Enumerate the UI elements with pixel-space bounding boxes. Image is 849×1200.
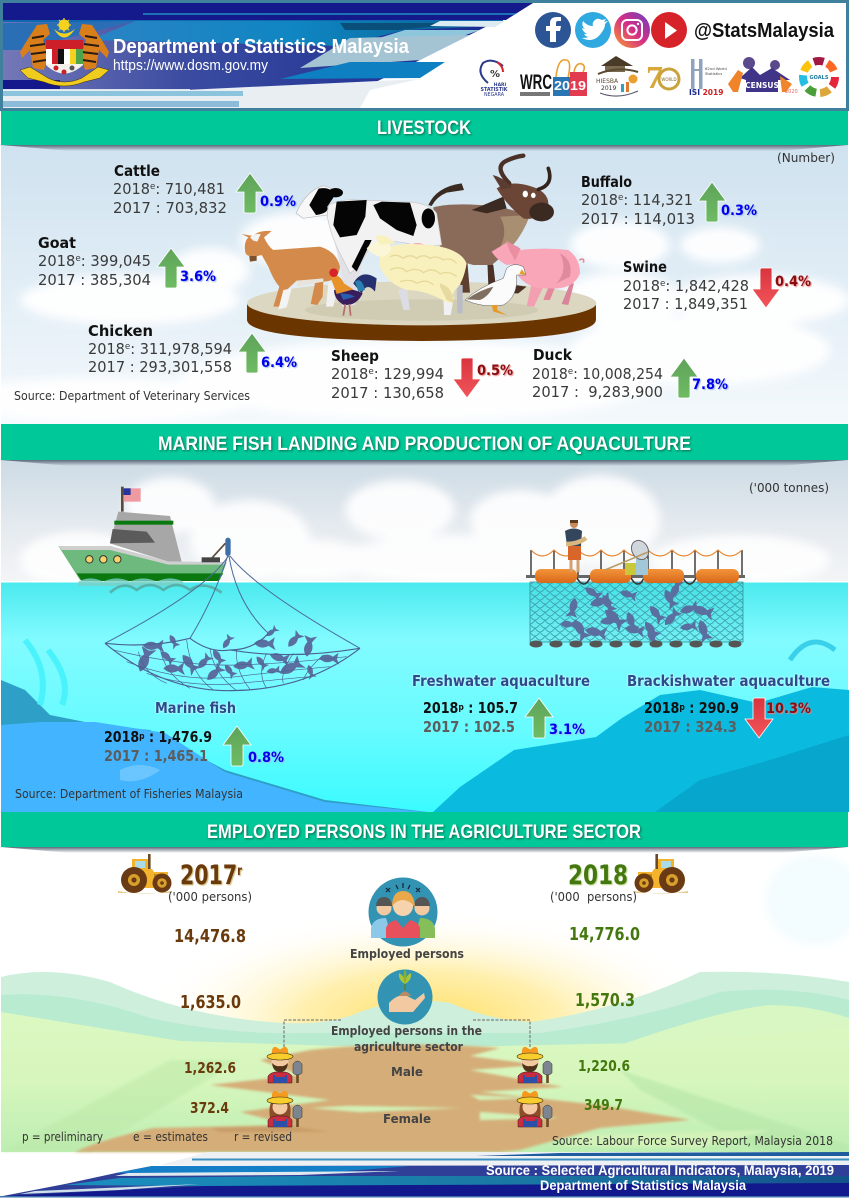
stat: swine: : 1,842,428	[665, 277, 749, 295]
stat: marine fish: : 1,476.9	[145, 728, 212, 746]
value: agriculture 2017: 1,635.0	[180, 992, 241, 1013]
stat: swine: Swine	[623, 258, 667, 276]
legend: p = preliminary	[22, 1130, 103, 1144]
section bar: employment	[1, 812, 848, 847]
text: unit 2018: ('000 persons)	[550, 890, 637, 904]
source: fisheries: Source: Department of Fisheries Malaysia	[15, 787, 243, 801]
value: male 2017: 1,262.6	[184, 1059, 236, 1077]
stat: goat: 2018	[38, 252, 76, 270]
ribbon	[20, 67, 109, 86]
logo: Census 2020: CENSUS	[745, 81, 779, 90]
stat: chicken	[88, 322, 297, 376]
shield	[46, 40, 83, 74]
stat: swine: e	[660, 279, 666, 289]
header banner	[0, 0, 849, 111]
stat: freshwater aquaculture: 3.1%	[549, 722, 585, 738]
logo: Census 2020: 2020	[785, 89, 798, 95]
stat: freshwater aquaculture	[412, 672, 590, 738]
stat: sheep: e	[368, 367, 374, 377]
stat: cattle: Cattle	[114, 162, 160, 180]
stat: freshwater aquaculture: 2018	[423, 699, 465, 717]
stat: duck: 7.8%	[692, 377, 728, 393]
stat: buffalo	[581, 173, 757, 228]
logo: SDG wheel: GOALS	[810, 75, 829, 81]
heading: marine: MARINE FISH LANDING AND PRODUCTION OF AQUACULTURE	[158, 434, 691, 455]
logo: WRC 2019: 2019	[554, 78, 586, 93]
year: 2018: 2018	[568, 860, 628, 891]
animal: cow	[296, 186, 442, 307]
cage net	[530, 582, 743, 642]
panel: marine and aquaculture	[1, 460, 849, 812]
stat: duck	[532, 346, 728, 401]
stat: chicken: 6.4%	[261, 355, 297, 371]
stat: goat: : 399,045	[81, 252, 151, 270]
section bar: marine	[1, 424, 848, 460]
panel: employed persons	[1, 847, 849, 1152]
illustration: fishing boat and net	[58, 487, 360, 691]
stat: swine: 2018	[623, 277, 661, 295]
logo: Hari Statistik Negara: %	[490, 69, 500, 80]
logo: SDG wheel	[803, 61, 835, 93]
text: unit: ('000 tonnes)	[749, 481, 829, 495]
bucket and scoop net	[605, 537, 652, 575]
stat: chicken: 2018	[88, 340, 126, 358]
stat: buffalo: Buffalo	[581, 173, 632, 191]
footer organisation: Department of Statistics Malaysia	[540, 1177, 746, 1193]
fish farmer	[565, 520, 586, 572]
hills	[1, 972, 849, 1152]
icon: male farmer 2018	[517, 1047, 552, 1083]
source: livestock: Source: Department of Veterinary Services	[14, 389, 250, 403]
social handle: @StatsMalaysia	[694, 20, 835, 42]
sun and crescent	[54, 18, 75, 38]
logo: WRC 2019: WRC	[520, 71, 552, 94]
icon: female farmer 2017	[267, 1091, 302, 1127]
logo: HIESBA	[596, 56, 638, 96]
stat: goat: 3.6%	[180, 269, 216, 285]
stat: cattle: e	[150, 182, 156, 192]
reef: right	[433, 642, 849, 812]
stat: chicken: e	[125, 342, 131, 352]
stat: swine: 0.4%	[775, 274, 811, 290]
website: https://www.dosm.gov.my	[113, 57, 268, 74]
logo: ISI 2019: Statistics	[705, 71, 722, 76]
logo: Hari Statistik Negara	[480, 61, 508, 98]
text: unit 2017: ('000 persons)	[168, 890, 252, 904]
stat: buffalo: : 114,321	[623, 191, 693, 209]
stat: goat: Goat	[38, 234, 76, 252]
logo: Hari Statistik Negara: HARI	[494, 82, 507, 88]
stat: cattle: 0.9%	[260, 194, 296, 210]
animal: duck	[465, 265, 526, 315]
stat: goat	[38, 234, 216, 289]
stat: brackishwater aquaculture: : 290.9	[685, 699, 739, 717]
icon: female farmer 2018	[517, 1091, 552, 1127]
title: Department of Statistics Malaysia	[113, 36, 410, 58]
stat: brackishwater aquaculture: 2017 : 324.3	[644, 718, 737, 736]
stat: cattle: 2017 : 703,832	[113, 199, 227, 217]
stat: brackishwater aquaculture: Brackishwater aquaculture	[627, 672, 830, 690]
icon: employed persons	[368, 878, 438, 946]
icon: tractor 2017	[118, 854, 172, 894]
label: employed persons in agriculture: agriculture sector	[354, 1039, 464, 1054]
stat: duck: 2017 : 9,283,900	[532, 383, 663, 401]
road	[75, 1044, 770, 1152]
logo: ISI 2019	[689, 59, 727, 97]
stat: cattle: : 710,481	[155, 180, 225, 198]
net mesh	[105, 633, 360, 691]
icon: instagram	[614, 12, 650, 48]
stat: freshwater aquaculture: p	[458, 703, 464, 713]
icon: male farmer 2017	[267, 1047, 302, 1083]
stat: buffalo: 0.3%	[721, 203, 757, 219]
value: female 2017: 372.4	[190, 1099, 229, 1117]
connector: right	[473, 1020, 530, 1047]
label: female: Female	[383, 1111, 431, 1126]
stat: marine fish	[104, 699, 284, 766]
stat: swine	[623, 258, 811, 313]
fish in net	[133, 625, 339, 685]
floats	[535, 569, 739, 583]
logo: 70 years: WORLD	[661, 77, 677, 82]
weights	[530, 640, 742, 648]
logo: HIESBA: HIESBA	[596, 78, 619, 85]
logo: HIESBA: 2019	[601, 85, 616, 92]
year: 2017: 2017	[180, 860, 255, 891]
stat: marine fish: 0.8%	[248, 750, 284, 766]
icon: facebook	[535, 12, 571, 48]
boat	[58, 487, 231, 593]
stat: cattle	[113, 162, 296, 217]
animal: pig	[492, 241, 584, 307]
stat: duck: 2018	[532, 365, 570, 383]
logo: Hari Statistik Negara: NEGARA	[484, 92, 505, 98]
animal: buffalo	[428, 156, 554, 293]
icon: youtube	[651, 12, 687, 48]
stat: goat: 2017 : 385,304	[38, 271, 151, 289]
value: female 2018: 349.7	[584, 1096, 623, 1114]
stat: buffalo: e	[618, 193, 624, 203]
stat: cattle: 2018	[113, 180, 151, 198]
heading: employment: EMPLOYED PERSONS IN THE AGRICULTURE SECTOR	[207, 822, 641, 843]
illustration: animals on platform	[242, 156, 596, 341]
logo: WRC 2019	[520, 60, 587, 96]
value: agriculture 2018: 1,570.3	[575, 990, 635, 1011]
stat: sheep	[331, 347, 513, 402]
value: employed persons 2018: 14,776.0	[569, 924, 640, 945]
animal: goat	[242, 231, 340, 309]
stat: freshwater aquaculture: : 105.7	[464, 699, 518, 717]
platform	[247, 281, 596, 341]
icon: tractor 2018	[634, 854, 688, 894]
illustration: aquaculture cage	[526, 520, 745, 648]
text: unit: (Number)	[777, 151, 835, 165]
stat: sheep: 2017 : 130,658	[331, 384, 444, 402]
stat: duck: Duck	[533, 346, 573, 364]
year: 2017: r	[237, 864, 242, 879]
stat: duck: : 10,008,254	[573, 365, 663, 383]
label: employed persons in agriculture	[331, 1023, 482, 1054]
logo: 70 years	[646, 59, 679, 95]
stat: chicken: 2017 : 293,301,558	[88, 358, 232, 376]
logo: Hari Statistik Negara: STATISTIK	[481, 87, 508, 93]
legend: r = revised	[234, 1130, 292, 1144]
animal: rooster	[329, 268, 377, 316]
emblem: coat of arms	[20, 18, 109, 86]
stat: chicken: Chicken	[88, 322, 153, 340]
logo: Census 2020	[728, 57, 798, 95]
net ropes	[105, 556, 360, 648]
panel: livestock	[0, 145, 849, 424]
stat: freshwater aquaculture: 2017 : 102.5	[423, 718, 515, 736]
icon: twitter	[575, 12, 611, 48]
stat: marine fish: Marine fish	[155, 699, 236, 717]
animal: sheep	[367, 235, 467, 315]
stat: sheep: Sheep	[331, 347, 379, 365]
stat: marine fish: p	[139, 732, 145, 742]
stat: brackishwater aquaculture: 2018	[644, 699, 686, 717]
legend: e = estimates	[133, 1130, 208, 1144]
stat: marine fish: 2017 : 1,465.1	[104, 747, 208, 765]
stat: swine: 2017 : 1,849,351	[623, 295, 748, 313]
stat: marine fish: 2018	[104, 728, 146, 746]
stat: goat: e	[75, 254, 81, 264]
logo: 70 years: 7	[646, 59, 663, 95]
section bar: livestock	[1, 111, 848, 145]
stat: sheep: : 129,994	[374, 365, 444, 383]
legend	[22, 1130, 292, 1144]
stat: sheep: 0.5%	[477, 363, 513, 379]
stat: freshwater aquaculture: Freshwater aquaculture	[412, 672, 590, 690]
stat: brackishwater aquaculture: p	[679, 703, 685, 713]
stat: brackishwater aquaculture: 10.3%	[766, 701, 811, 717]
stat: buffalo: 2017 : 114,013	[581, 210, 695, 228]
stat: chicken: : 311,978,594	[130, 340, 232, 358]
stat: brackishwater aquaculture	[627, 672, 830, 738]
connector: left	[284, 1020, 341, 1047]
footer banner	[0, 1152, 849, 1198]
cage fish	[560, 577, 715, 648]
reef: left	[1, 640, 428, 812]
tigers	[20, 24, 109, 70]
label: employed persons: Employed persons	[350, 946, 464, 961]
stat: duck: e	[568, 367, 574, 377]
logo: ISI 2019: 62nd World	[705, 66, 727, 71]
stat: buffalo: 2018	[581, 191, 619, 209]
rail and posts	[526, 550, 745, 584]
stat: sheep: 2018	[331, 365, 369, 383]
value: employed persons 2017: 14,476.8	[174, 926, 246, 947]
label: male: Male	[391, 1064, 423, 1079]
label: employed persons in agriculture: Employed persons in the	[331, 1023, 482, 1038]
heading: livestock: LIVESTOCK	[377, 118, 471, 139]
icon: agriculture hand	[378, 969, 432, 1024]
value: male 2018: 1,220.6	[578, 1057, 630, 1075]
logo: ISI 2019: ISI 2019	[689, 88, 723, 97]
